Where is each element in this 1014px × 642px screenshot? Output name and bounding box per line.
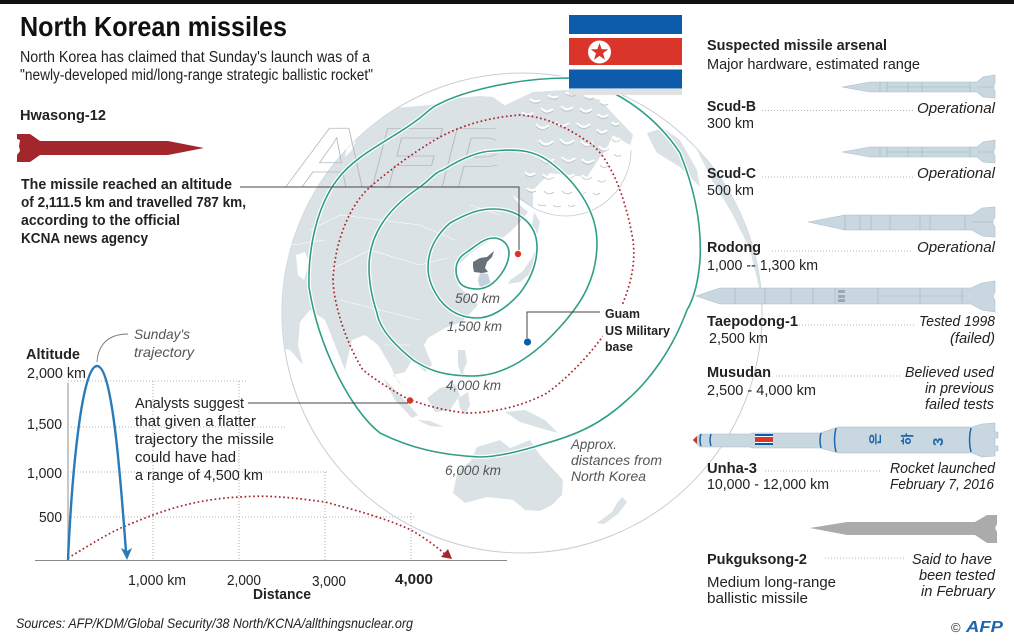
title: North Korean missiles — [20, 11, 287, 42]
rocket: Unha-3: 하 — [900, 433, 915, 445]
item: Scud-B: Operational — [917, 101, 996, 117]
heading: arsenal: Suspected missile arsenal — [707, 38, 887, 54]
heading: arsenal: Major hardware, estimated range — [707, 57, 920, 73]
text: altitude note: of 2,111.5 km and travelled 787 km, — [21, 195, 246, 211]
axis labels: altitude: 1,000 — [27, 466, 62, 482]
item: Musudan: Musudan — [707, 365, 771, 381]
item: Scud-C: Operational — [917, 166, 996, 182]
item: Unha-3: Unha-3 — [707, 461, 757, 477]
marker: 4,500 km point — [407, 397, 413, 404]
label: Sunday's trajectory: Sunday's — [134, 326, 190, 342]
map labels: North Korea — [571, 468, 646, 484]
logo: AFP — [951, 619, 1003, 636]
item: Scud-C — [707, 140, 996, 199]
item: Unha-3: 10,000 - 12,000 km — [707, 477, 829, 493]
watermark: AFP: AFP — [285, 111, 516, 206]
item: Pukguksong-2: been tested — [919, 568, 996, 584]
land masses — [270, 90, 765, 524]
item: Scud-B — [707, 75, 996, 132]
rocket: Rodong — [808, 207, 995, 237]
map labels: 500 km — [455, 290, 500, 306]
axis labels: altitude — [26, 347, 86, 526]
item: Taepodong-1: Taepodong-1 — [707, 314, 798, 330]
sources: Sources: AFP/KDM/Global Security/38 North/KCNA/allthingsnuclear.org — [16, 615, 413, 631]
label: Guam US Military base: base — [605, 339, 633, 354]
axis labels: distance: 2,000 — [227, 573, 261, 589]
land: Russian far east under golf-ball pattern — [495, 90, 633, 207]
text: analysts note — [135, 396, 274, 484]
item: Rodong — [707, 207, 996, 274]
rocket: Taepodong-1 — [696, 281, 995, 312]
axes — [35, 560, 507, 562]
item: Taepodong-1: (failed) — [950, 331, 995, 347]
item: Pukguksong-2: in February — [921, 584, 996, 600]
rocket: Scud-B — [842, 75, 995, 98]
item: Unha-3: February 7, 2016 — [890, 477, 995, 493]
item: Pukguksong-2: Medium long-range — [707, 575, 836, 591]
flag on rocket — [755, 434, 773, 445]
rocket: Pukguksong-2 — [810, 515, 997, 543]
range ring: 4,500 km dotted — [333, 115, 634, 413]
text: altitude note: according to the official — [21, 213, 180, 229]
heading: arsenal — [707, 38, 920, 73]
logo: AFP: AFP — [965, 619, 1003, 636]
item: Pukguksong-2 — [707, 515, 997, 607]
item: Rodong: Rodong — [707, 240, 761, 256]
watermark: golf ball pattern — [520, 92, 631, 216]
item: Pukguksong-2: Said to have — [912, 552, 992, 568]
item: Scud-B: Scud-B — [707, 99, 756, 115]
label: Sunday's trajectory — [134, 326, 195, 360]
panel: arsenal — [693, 38, 998, 607]
map labels: 6,000 km — [445, 462, 501, 478]
item: Pukguksong-2: Pukguksong-2 — [707, 552, 807, 568]
top bar — [0, 0, 1014, 4]
text: altitude note — [21, 177, 246, 247]
grid — [68, 381, 415, 560]
item: Rodong: Operational — [917, 240, 996, 256]
rocket: Unha-3: 은 — [868, 433, 883, 445]
flag: North Korea — [569, 15, 682, 95]
axis labels: distance — [128, 572, 433, 603]
item: Musudan: 2,500 - 4,000 km — [707, 383, 816, 399]
leader: Sunday's trajectory — [97, 334, 128, 362]
intro text: "newly-developed mid/long-range strategic ballistic rocket" — [20, 67, 373, 84]
item: Taepodong-1: 2,500 km — [709, 331, 768, 347]
axis labels: distance: 1,000 km — [128, 573, 186, 589]
item: Musudan: Believed used — [905, 365, 995, 381]
text: altitude note: KCNA news agency — [21, 231, 148, 247]
item: Scud-C: 500 km — [707, 183, 754, 199]
item: Taepodong-1: Tested 1998 — [919, 314, 995, 330]
label: Sunday's trajectory: trajectory — [134, 344, 195, 360]
text: analysts note: trajectory the missile — [135, 432, 274, 448]
item: Musudan: failed tests — [925, 397, 994, 413]
logo: AFP: © — [951, 620, 961, 635]
axis labels: distance: 4,000 — [395, 572, 433, 588]
heading: Hwasong-12: Hwasong-12 — [20, 107, 106, 124]
marker: Guam — [524, 338, 531, 346]
map labels — [445, 290, 662, 484]
item: Scud-C: Scud-C — [707, 166, 757, 182]
intro text — [20, 49, 373, 84]
arrowhead: flatter trajectory — [441, 549, 452, 559]
item: Musudan: in previous — [925, 381, 994, 397]
leader: altitude note to splashdown — [240, 187, 519, 250]
arrowhead: Sunday's trajectory — [121, 548, 132, 560]
leader: Guam — [527, 312, 600, 338]
axis labels: distance: Distance — [253, 587, 311, 603]
range ring: 1,500 km — [428, 209, 537, 318]
label: Guam US Military base — [605, 306, 671, 354]
map labels: distances from — [571, 452, 662, 468]
map labels: 4,000 km — [446, 377, 501, 393]
text: analysts note: Analysts suggest — [135, 396, 244, 412]
item: Musudan — [707, 365, 995, 413]
text: analysts note: could have had — [135, 450, 236, 466]
item: Pukguksong-2: ballistic missile — [707, 591, 808, 607]
map labels: Approx. — [570, 436, 617, 452]
leader: analysts note — [248, 402, 408, 404]
map: globe with range rings — [270, 73, 765, 553]
item: Unha-3: Rocket launched — [890, 461, 996, 477]
axis labels: altitude: 2,000 km — [27, 366, 86, 382]
South Korea — [478, 273, 491, 288]
icon: Hwasong-12 missile — [17, 134, 204, 162]
axis labels: altitude: Altitude — [26, 347, 80, 363]
rocket: Scud-C — [842, 140, 995, 163]
item: Taepodong-1 — [696, 281, 995, 347]
text: altitude note: The missile reached an altitude — [21, 177, 232, 193]
curve: flatter trajectory — [68, 496, 446, 558]
axis labels: altitude: 1,500 — [27, 417, 62, 433]
North Korea — [473, 251, 494, 273]
axis labels: distance: 3,000 — [312, 574, 346, 590]
curve: Sunday's trajectory — [68, 366, 126, 560]
chart: trajectory — [26, 326, 507, 603]
label: Guam US Military base: US Military — [605, 323, 671, 338]
intro text: North Korea has claimed that Sunday's launch was of a — [20, 49, 370, 66]
range ring: 4,000 km — [369, 150, 597, 376]
range ring: 500 km — [456, 238, 509, 289]
item: Rodong: 1,000 -- 1,300 km — [707, 258, 818, 274]
rocket: Unha-3 — [693, 423, 998, 457]
rocket: Unha-3: 3 — [930, 438, 947, 446]
globe outline — [282, 73, 762, 553]
item: Unha-3 — [693, 423, 998, 493]
text: analysts note: that given a flatter — [135, 414, 256, 430]
axis labels: altitude: 500 — [39, 510, 62, 526]
marker: splashdown — [515, 251, 521, 257]
label: Guam US Military base: Guam — [605, 306, 640, 321]
text: analysts note: a range of 4,500 km — [135, 468, 263, 484]
map labels: 1,500 km — [447, 318, 502, 334]
range ring: 6,000 km — [309, 78, 700, 457]
item: Scud-B: 300 km — [707, 116, 754, 132]
